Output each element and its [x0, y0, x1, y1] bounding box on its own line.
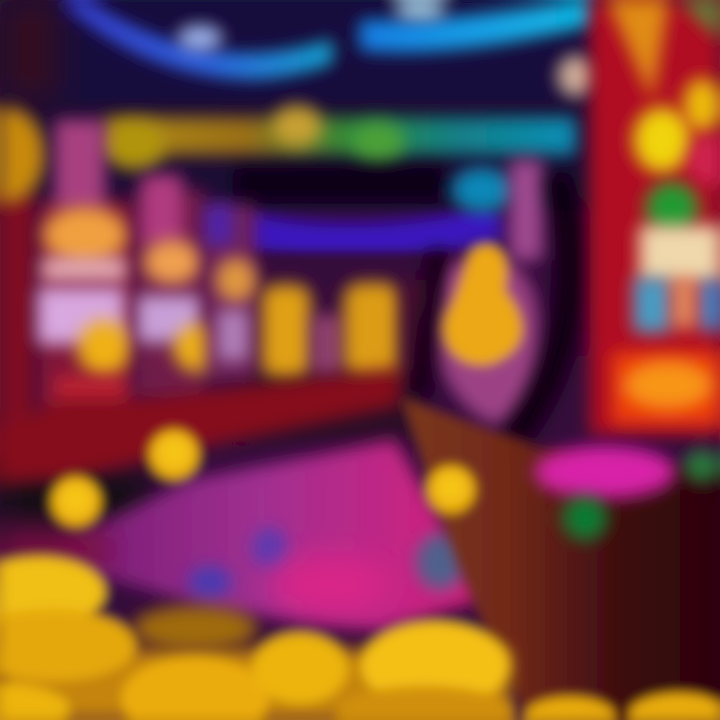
- slot machine 1: [38, 120, 134, 415]
- slot machine 3: [205, 205, 256, 380]
- coin: [50, 476, 102, 528]
- left wall: [0, 108, 150, 530]
- slot machine 5: [344, 280, 430, 377]
- red base of the machine row: [0, 368, 400, 480]
- slot machine: right foreground: [590, 0, 720, 435]
- floor: [0, 440, 480, 630]
- slot machine 4: [262, 285, 342, 377]
- floating gold coins: [50, 429, 476, 528]
- coloured light band: [105, 106, 575, 169]
- row of slot machines: [38, 120, 430, 415]
- centre machine with golden bell: [418, 175, 570, 438]
- coin: [148, 429, 200, 481]
- dark ceiling gap and purple band: [235, 160, 542, 260]
- gold coin pile: [0, 556, 720, 720]
- coin: [426, 465, 476, 515]
- slot machine 2: [136, 175, 226, 400]
- ceiling: neon lights: [60, 0, 594, 96]
- wooden counter: [402, 398, 720, 720]
